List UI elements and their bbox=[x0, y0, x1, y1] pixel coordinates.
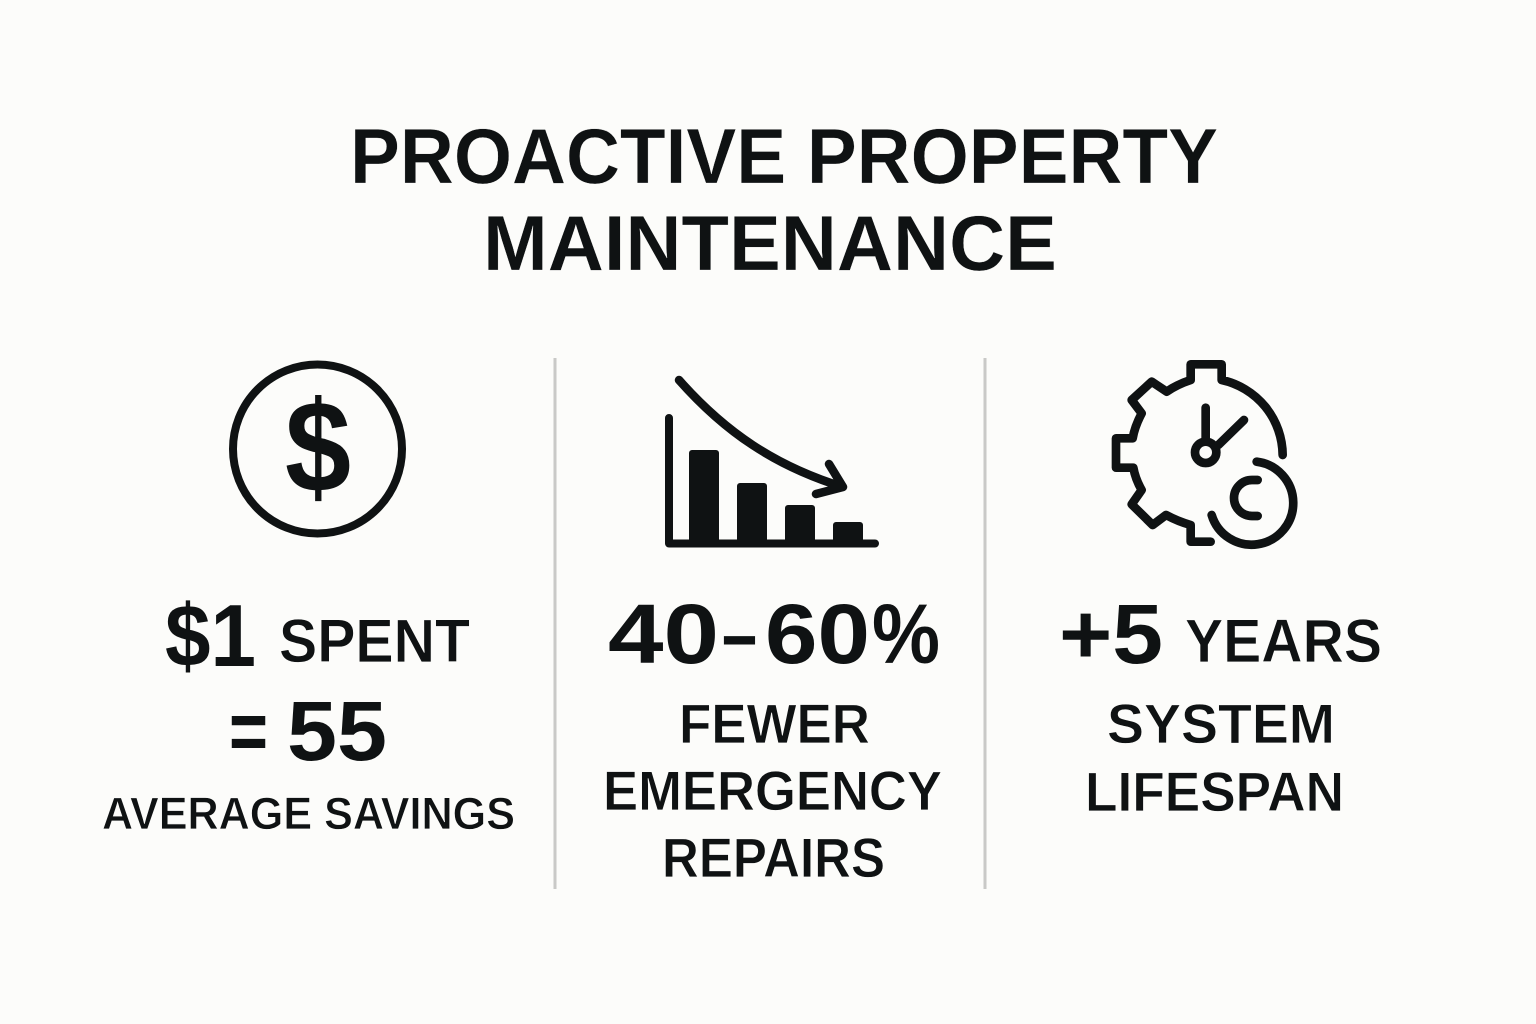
label: fewer emergency repairs: EMERGENCY bbox=[603, 759, 942, 822]
stat: one dollar spent bbox=[165, 586, 470, 685]
icon: dollar coin: $ bbox=[285, 374, 351, 520]
stat: 40 to 60 percent: – bbox=[722, 587, 757, 681]
stat: one dollar spent: SPENT bbox=[279, 607, 470, 675]
label: system lifespan: SYSTEM bbox=[1107, 692, 1335, 755]
label: fewer emergency repairs: FEWER bbox=[679, 692, 870, 755]
label: fewer emergency repairs bbox=[603, 692, 942, 889]
label: fewer emergency repairs: REPAIRS bbox=[662, 826, 885, 889]
label: system lifespan bbox=[1085, 692, 1344, 823]
label: average savings: AVERAGE SAVINGS bbox=[102, 788, 515, 839]
title bbox=[350, 112, 1218, 287]
icon: gear with clock bbox=[1116, 364, 1293, 545]
panel: system lifespan bbox=[1059, 364, 1382, 823]
label: system lifespan: LIFESPAN bbox=[1085, 760, 1344, 823]
stat: equals 55: 55 bbox=[287, 684, 387, 778]
stat: equals 55 bbox=[229, 684, 387, 778]
stat: one dollar spent: $1 bbox=[165, 586, 256, 685]
stat: 40 to 60 percent: % bbox=[872, 587, 940, 681]
title: PROACTIVE PROPERTY bbox=[350, 112, 1218, 200]
icon: dollar coin bbox=[233, 364, 402, 534]
stat: plus five years bbox=[1059, 587, 1382, 681]
icon: declining bar chart bbox=[669, 380, 875, 544]
stat: plus five years: YEARS bbox=[1185, 607, 1382, 675]
panel: emergency repairs bbox=[603, 380, 942, 889]
panel: savings bbox=[102, 364, 515, 839]
stat: plus five years: +5 bbox=[1059, 587, 1163, 681]
stat: 40 to 60 percent: 40 bbox=[608, 587, 719, 681]
stat: equals 55: = bbox=[229, 684, 268, 778]
stat: 40 to 60 percent: 60 bbox=[765, 587, 870, 681]
title: MAINTENANCE bbox=[483, 199, 1057, 287]
